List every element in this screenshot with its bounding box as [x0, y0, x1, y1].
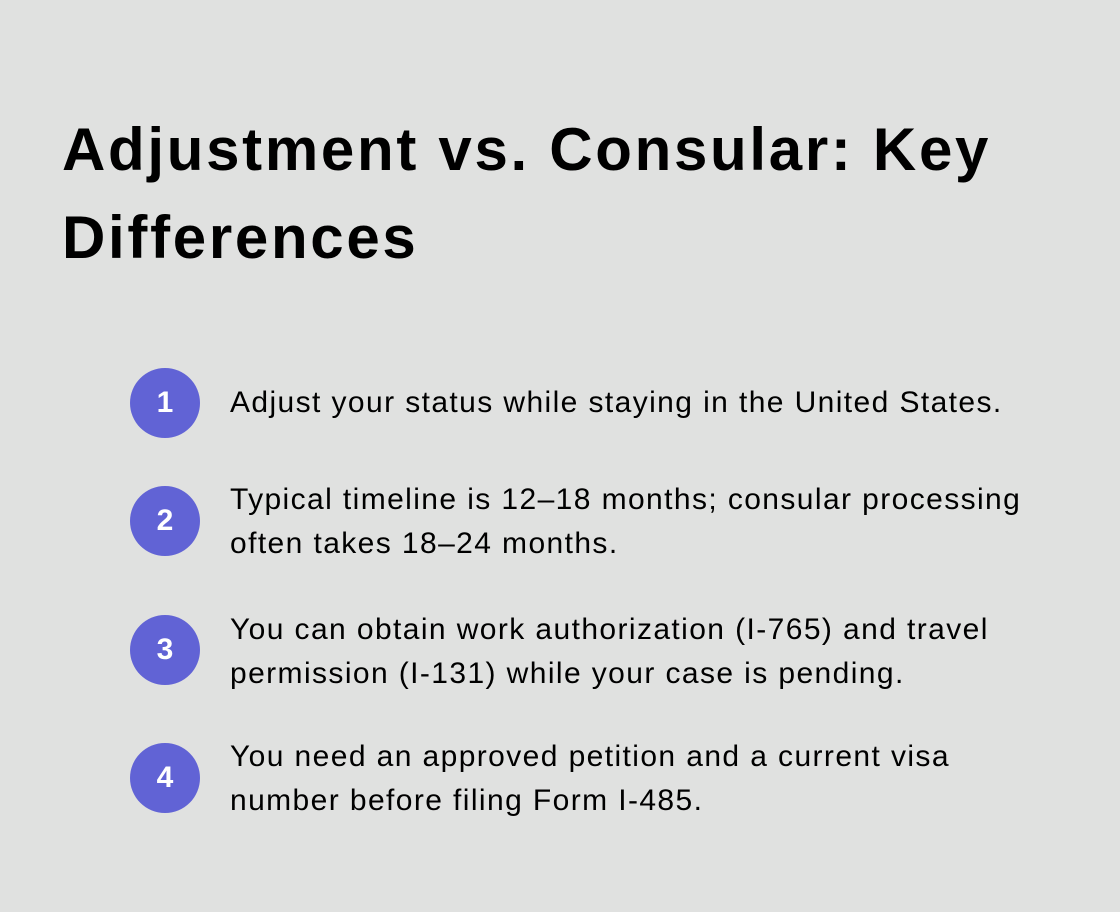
title	[62, 116, 991, 271]
list item 4	[130, 740, 950, 817]
icon: number 3 circle	[130, 615, 200, 685]
icon: number 4 circle	[130, 743, 200, 813]
text: item 4: You need an approved petition and a current visa	[230, 740, 950, 773]
icon: number 2 circle	[130, 486, 200, 556]
icon: number 2 circle: 2	[157, 504, 173, 537]
list item 1	[130, 368, 1003, 438]
text: item 3: You can obtain work authorization (I-765) and travel	[230, 613, 989, 646]
icon: number 3 circle: 3	[157, 633, 173, 666]
text: item 2: Typical timeline is 12–18 months; consular processing	[230, 483, 1021, 516]
text: item 3: permission (I-131) while your case is pending.	[230, 657, 905, 690]
icon: number 1 circle	[130, 368, 200, 438]
text: item 2: often takes 18–24 months.	[230, 527, 619, 560]
icon: number 4 circle: 4	[157, 761, 173, 794]
text: item 2	[230, 483, 1021, 560]
text: item 3	[230, 613, 989, 690]
text: item 4: number before filing Form I-485.	[230, 784, 703, 817]
text: item 1: Adjust your status while staying in the United States.	[230, 386, 1003, 419]
list item 3	[130, 613, 989, 690]
title: Adjustment vs. Consular: Key	[62, 116, 991, 183]
title: Differences	[62, 204, 419, 271]
list item 2	[130, 483, 1021, 560]
text: item 4	[230, 740, 950, 817]
icon: number 1 circle: 1	[157, 386, 173, 419]
